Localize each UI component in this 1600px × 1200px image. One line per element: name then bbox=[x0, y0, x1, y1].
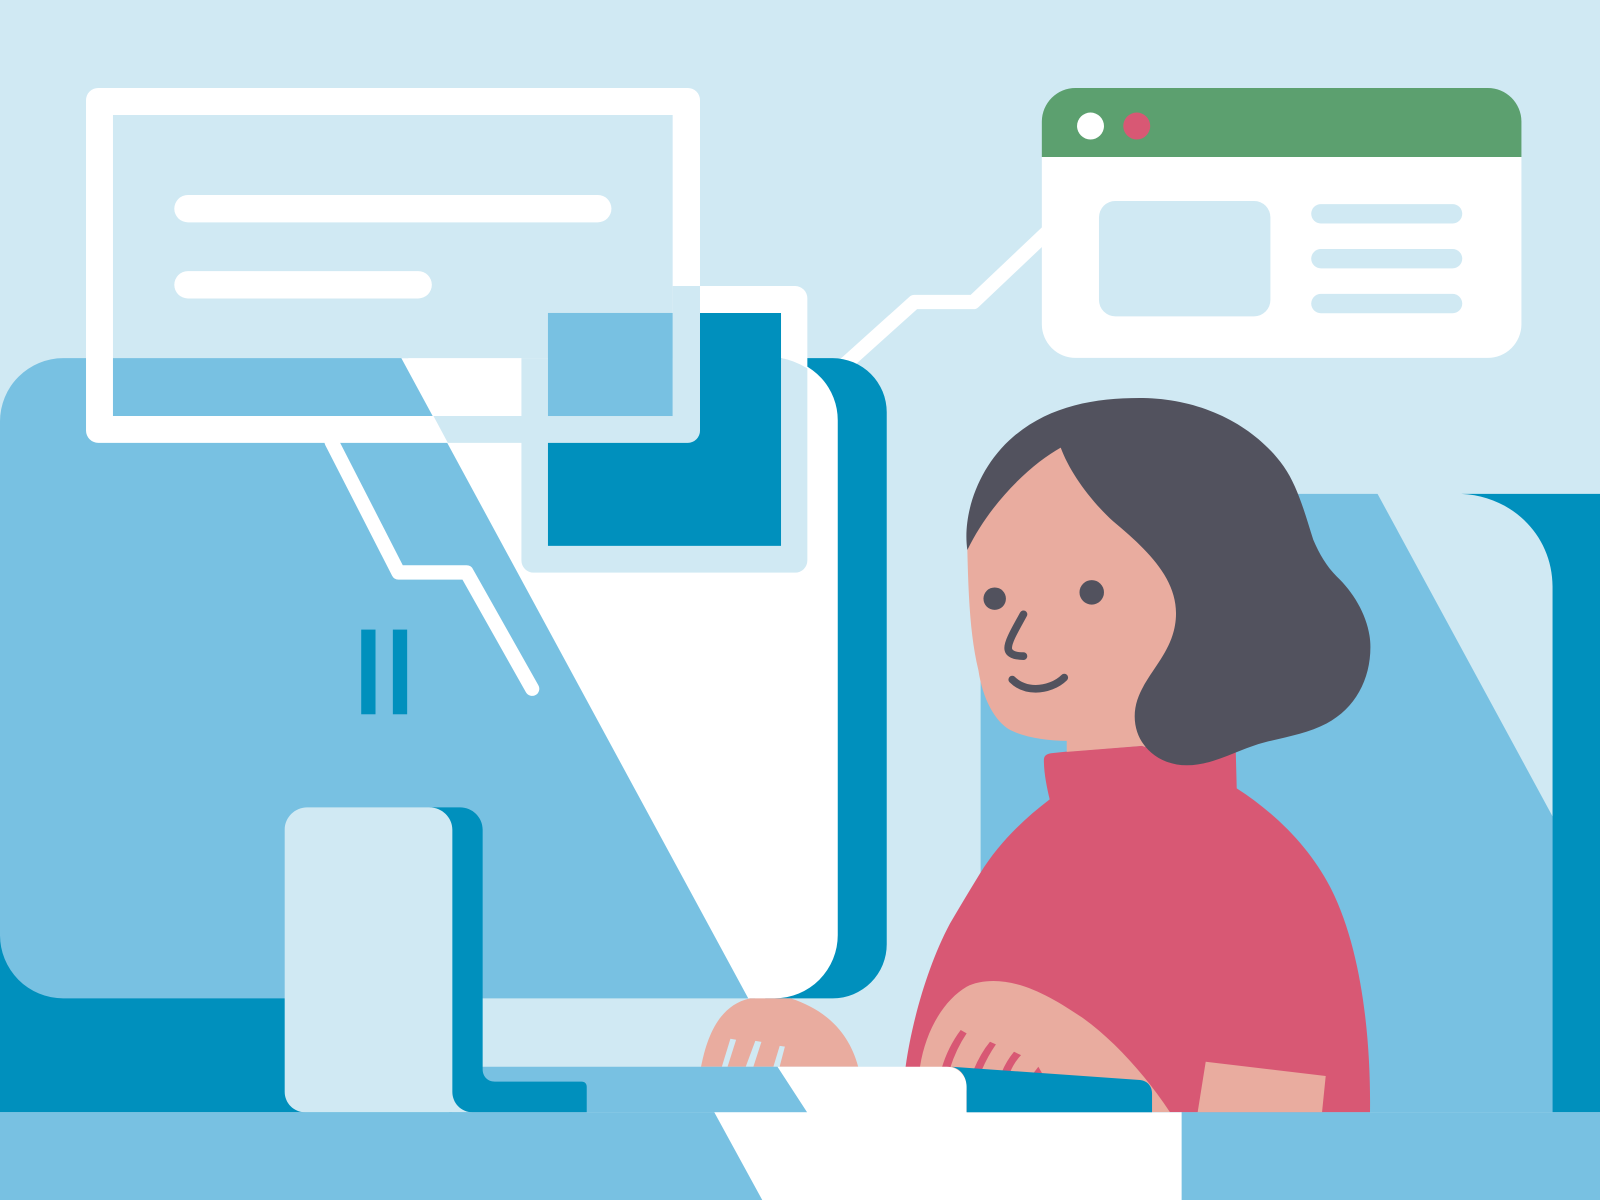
text line 1 bbox=[1311, 204, 1462, 223]
connector: line from frame bbox=[332, 442, 532, 689]
stand: dark monitor stand bbox=[430, 807, 587, 1112]
panel: monitor screen white bbox=[401, 358, 838, 998]
hair bbox=[966, 398, 1370, 765]
person: woman bbox=[905, 398, 1370, 1112]
text line 3 bbox=[1311, 294, 1462, 313]
small frame: dark fill bbox=[548, 313, 781, 546]
panel: right dark block bbox=[1461, 494, 1600, 1112]
laptop: dark blue bbox=[952, 1067, 1152, 1112]
panel: right background block bbox=[981, 494, 1553, 1112]
face and neck bbox=[967, 429, 1194, 760]
small frame: inverted sides bbox=[521, 358, 807, 573]
panel: light tower bbox=[285, 807, 472, 1112]
panel: large outlined window frame bbox=[86, 88, 700, 443]
icon: white window dot bbox=[1077, 113, 1104, 139]
small frame: white corner bbox=[700, 286, 807, 368]
icon: pink window dot bbox=[1123, 113, 1150, 139]
text line: large window bottom bbox=[174, 271, 432, 298]
finger lines bbox=[942, 1030, 1043, 1076]
right hand with fingers bbox=[920, 981, 1170, 1112]
panel: monitor screen blue bbox=[0, 358, 755, 998]
nose bbox=[1008, 614, 1023, 656]
panel: browser window bbox=[1042, 88, 1521, 358]
small frame: blue overlap rectangle bbox=[548, 313, 673, 416]
left eye bbox=[983, 587, 1006, 610]
forearm patch bbox=[1198, 1062, 1326, 1112]
panel: monitor back bbox=[765, 358, 887, 998]
text line: large window top bbox=[174, 195, 611, 222]
mouth bbox=[1012, 678, 1064, 689]
frame overlap: inverted band bbox=[433, 286, 700, 443]
panel: dark base under monitor bbox=[0, 908, 452, 1112]
window title bar bbox=[1042, 88, 1521, 157]
hand: left hand with fingers bbox=[701, 998, 858, 1067]
desk: white surface bbox=[714, 1067, 1182, 1200]
right eye bbox=[1079, 580, 1104, 605]
sweater bbox=[905, 746, 1370, 1112]
desk: blue keyboard band bbox=[452, 1067, 807, 1112]
connector: line to browser window bbox=[843, 229, 1051, 366]
desk: blue floor strip bbox=[0, 1112, 1600, 1200]
image placeholder bbox=[1099, 201, 1270, 316]
window body bbox=[1042, 157, 1521, 358]
text line 2 bbox=[1311, 249, 1462, 268]
icon: pause bars bbox=[361, 630, 407, 714]
